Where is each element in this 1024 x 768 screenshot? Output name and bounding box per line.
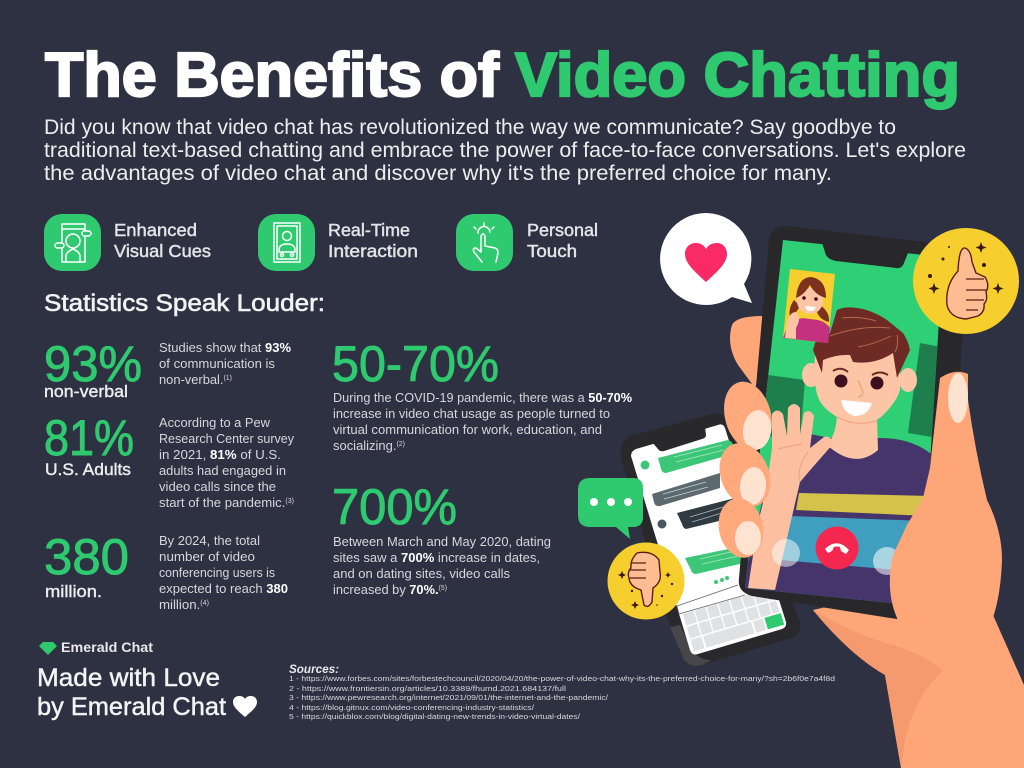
girl video thumbnail <box>783 269 835 343</box>
main phone <box>739 226 967 624</box>
intro paragraph: the advantages of video chat and discover why it's the preferred choice for many. <box>44 162 832 185</box>
title: Video Chatting <box>515 41 960 110</box>
lower palm of hand <box>813 590 1024 768</box>
boy torso and shirt <box>745 434 930 603</box>
boy's waving hand and forearm <box>748 404 833 590</box>
stat: 81%: U.S. Adults <box>45 461 131 479</box>
boy head <box>802 307 917 423</box>
stat: 93%: of communication is <box>159 356 275 371</box>
stat: 700%: 700% <box>332 479 457 535</box>
stat: 50-70%: During the COVID-19 pandemic, there was a 50-70% <box>333 390 632 405</box>
phone screen with video call <box>745 240 939 604</box>
stat: 81%: According to a Pew <box>159 415 271 430</box>
stat: 380 million <box>44 529 288 612</box>
sources: 2 - https://www.frontiersin.org/articles/10.3389/fhumd.2021.684137/full <box>289 684 566 693</box>
made with love tagline: by Emerald Chat <box>37 693 226 721</box>
icon: phone with person <box>274 223 300 262</box>
small chat phone <box>621 413 800 666</box>
benefit: personal touch: Touch <box>527 241 577 261</box>
stat: 700%: increased by 70%. <box>333 582 439 597</box>
stat: 380 million: 380 <box>44 529 129 585</box>
upper finger behind phone <box>730 316 775 388</box>
stat: 81%: 81% <box>44 410 134 466</box>
stat: 50-70%: increase in video chat usage as people turned to <box>333 406 610 421</box>
stat: 380 million: number of video <box>159 549 255 564</box>
stat: 81% <box>44 410 294 510</box>
stat: 50-70%: 50-70% <box>332 336 499 392</box>
stat: 81%: in 2021, 81% of U.S. <box>159 447 281 462</box>
stat: 380 million: (4) <box>200 600 209 607</box>
notch <box>822 243 908 268</box>
icon: tapping hand <box>473 223 498 262</box>
benefit: personal touch <box>456 214 598 271</box>
benefit: personal touch: Personal <box>527 220 598 240</box>
stat: 380 million: conferencing users is <box>159 565 275 580</box>
stat: 50-70%: socializing. <box>333 438 397 453</box>
statistics heading: Statistics Speak Louder: <box>44 290 325 317</box>
thumbs down badge <box>608 542 684 620</box>
sources: 5 - https://quickblox.com/blog/digital-dating-new-trends-in-video-virtual-dates/ <box>289 712 581 721</box>
stat: 50-70% <box>332 336 632 453</box>
stat: 50-70%: (2) <box>396 441 405 448</box>
call controls <box>816 526 858 570</box>
intro paragraph: Did you know that video chat has revolutionized the way we communicate? Say goodbye to <box>44 116 896 139</box>
stat: 93%: Studies show that 93% <box>159 340 291 355</box>
stat: 93%: non-verbal <box>44 383 128 401</box>
title <box>45 41 960 110</box>
benefit: enhanced visual cues: Enhanced <box>114 220 197 240</box>
benefit: real-time interaction <box>258 214 418 271</box>
stat: 380 million: million. <box>45 583 102 601</box>
brand logo: Emerald Chat <box>61 639 153 655</box>
stat: 81%: start of the pandemic. <box>159 495 284 510</box>
sources: Sources: <box>289 662 339 676</box>
stat: 93%: (1) <box>224 375 232 382</box>
sources: 4 - https://blog.gitnux.com/video-conferencing-industry-statistics/ <box>289 703 535 712</box>
stat: 380 million: By 2024, the total <box>159 533 260 548</box>
thumbs up badge <box>913 228 1019 334</box>
heart speech bubble <box>660 213 752 305</box>
sources: 1 - https://www.forbes.com/sites/forbestechcouncil/2020/04/20/the-power-of-video-chat-why-its-the-preferred-choice-for-many/?sh=2b6f0e7a4f8d <box>289 674 835 683</box>
stat: 93% <box>44 336 291 401</box>
sources <box>289 662 835 721</box>
stat: 380 million: million. <box>159 597 199 612</box>
stat: 380 million: expected to reach 380 <box>159 581 288 596</box>
stat: 700%: sites saw a 700% increase in dates, <box>333 550 540 565</box>
stat: 700%: (5) <box>439 585 447 592</box>
made with love tagline: Made with Love <box>37 664 220 692</box>
sources: 3 - https://www.pewresearch.org/internet/2021/09/01/the-internet-and-the-pandemic/ <box>289 693 609 702</box>
benefit: real-time interaction: Interaction <box>328 241 418 261</box>
left hand fingers with nails <box>710 376 780 562</box>
benefit: enhanced visual cues: Visual Cues <box>114 241 211 261</box>
stat: 81%: video calls since the <box>159 479 276 494</box>
stat: 81%: Research Center survey <box>159 431 294 446</box>
translucent call buttons <box>772 539 901 575</box>
stat: 93%: non-verbal. <box>159 372 224 387</box>
stat: 81%: (3) <box>285 498 294 505</box>
benefit: real-time interaction: Real-Time <box>328 220 410 240</box>
intro paragraph <box>44 116 966 185</box>
title: The Benefits of <box>45 41 499 110</box>
stat: 50-70%: virtual communication for work, education, and <box>333 422 602 437</box>
intro paragraph: traditional text-based chatting and embrace the power of face-to-face conversations. Let's explore <box>44 139 966 162</box>
stat: 700% <box>332 479 551 597</box>
stat: 81%: adults had engaged in <box>159 463 286 478</box>
stat: 700%: and on dating sites, video calls <box>333 566 510 581</box>
made with love tagline <box>37 664 257 721</box>
boy neck <box>827 415 878 459</box>
benefit: enhanced visual cues <box>44 214 211 271</box>
right hand thumb and thenar <box>890 372 1002 655</box>
icon: phone with chat bubbles <box>55 224 91 262</box>
illustration: phone video call held in hand <box>578 213 1024 768</box>
stat: 700%: Between March and May 2020, dating <box>333 534 551 549</box>
green typing bubble <box>578 478 643 539</box>
stat: 93%: 93% <box>44 336 142 392</box>
keyboard <box>683 587 784 651</box>
